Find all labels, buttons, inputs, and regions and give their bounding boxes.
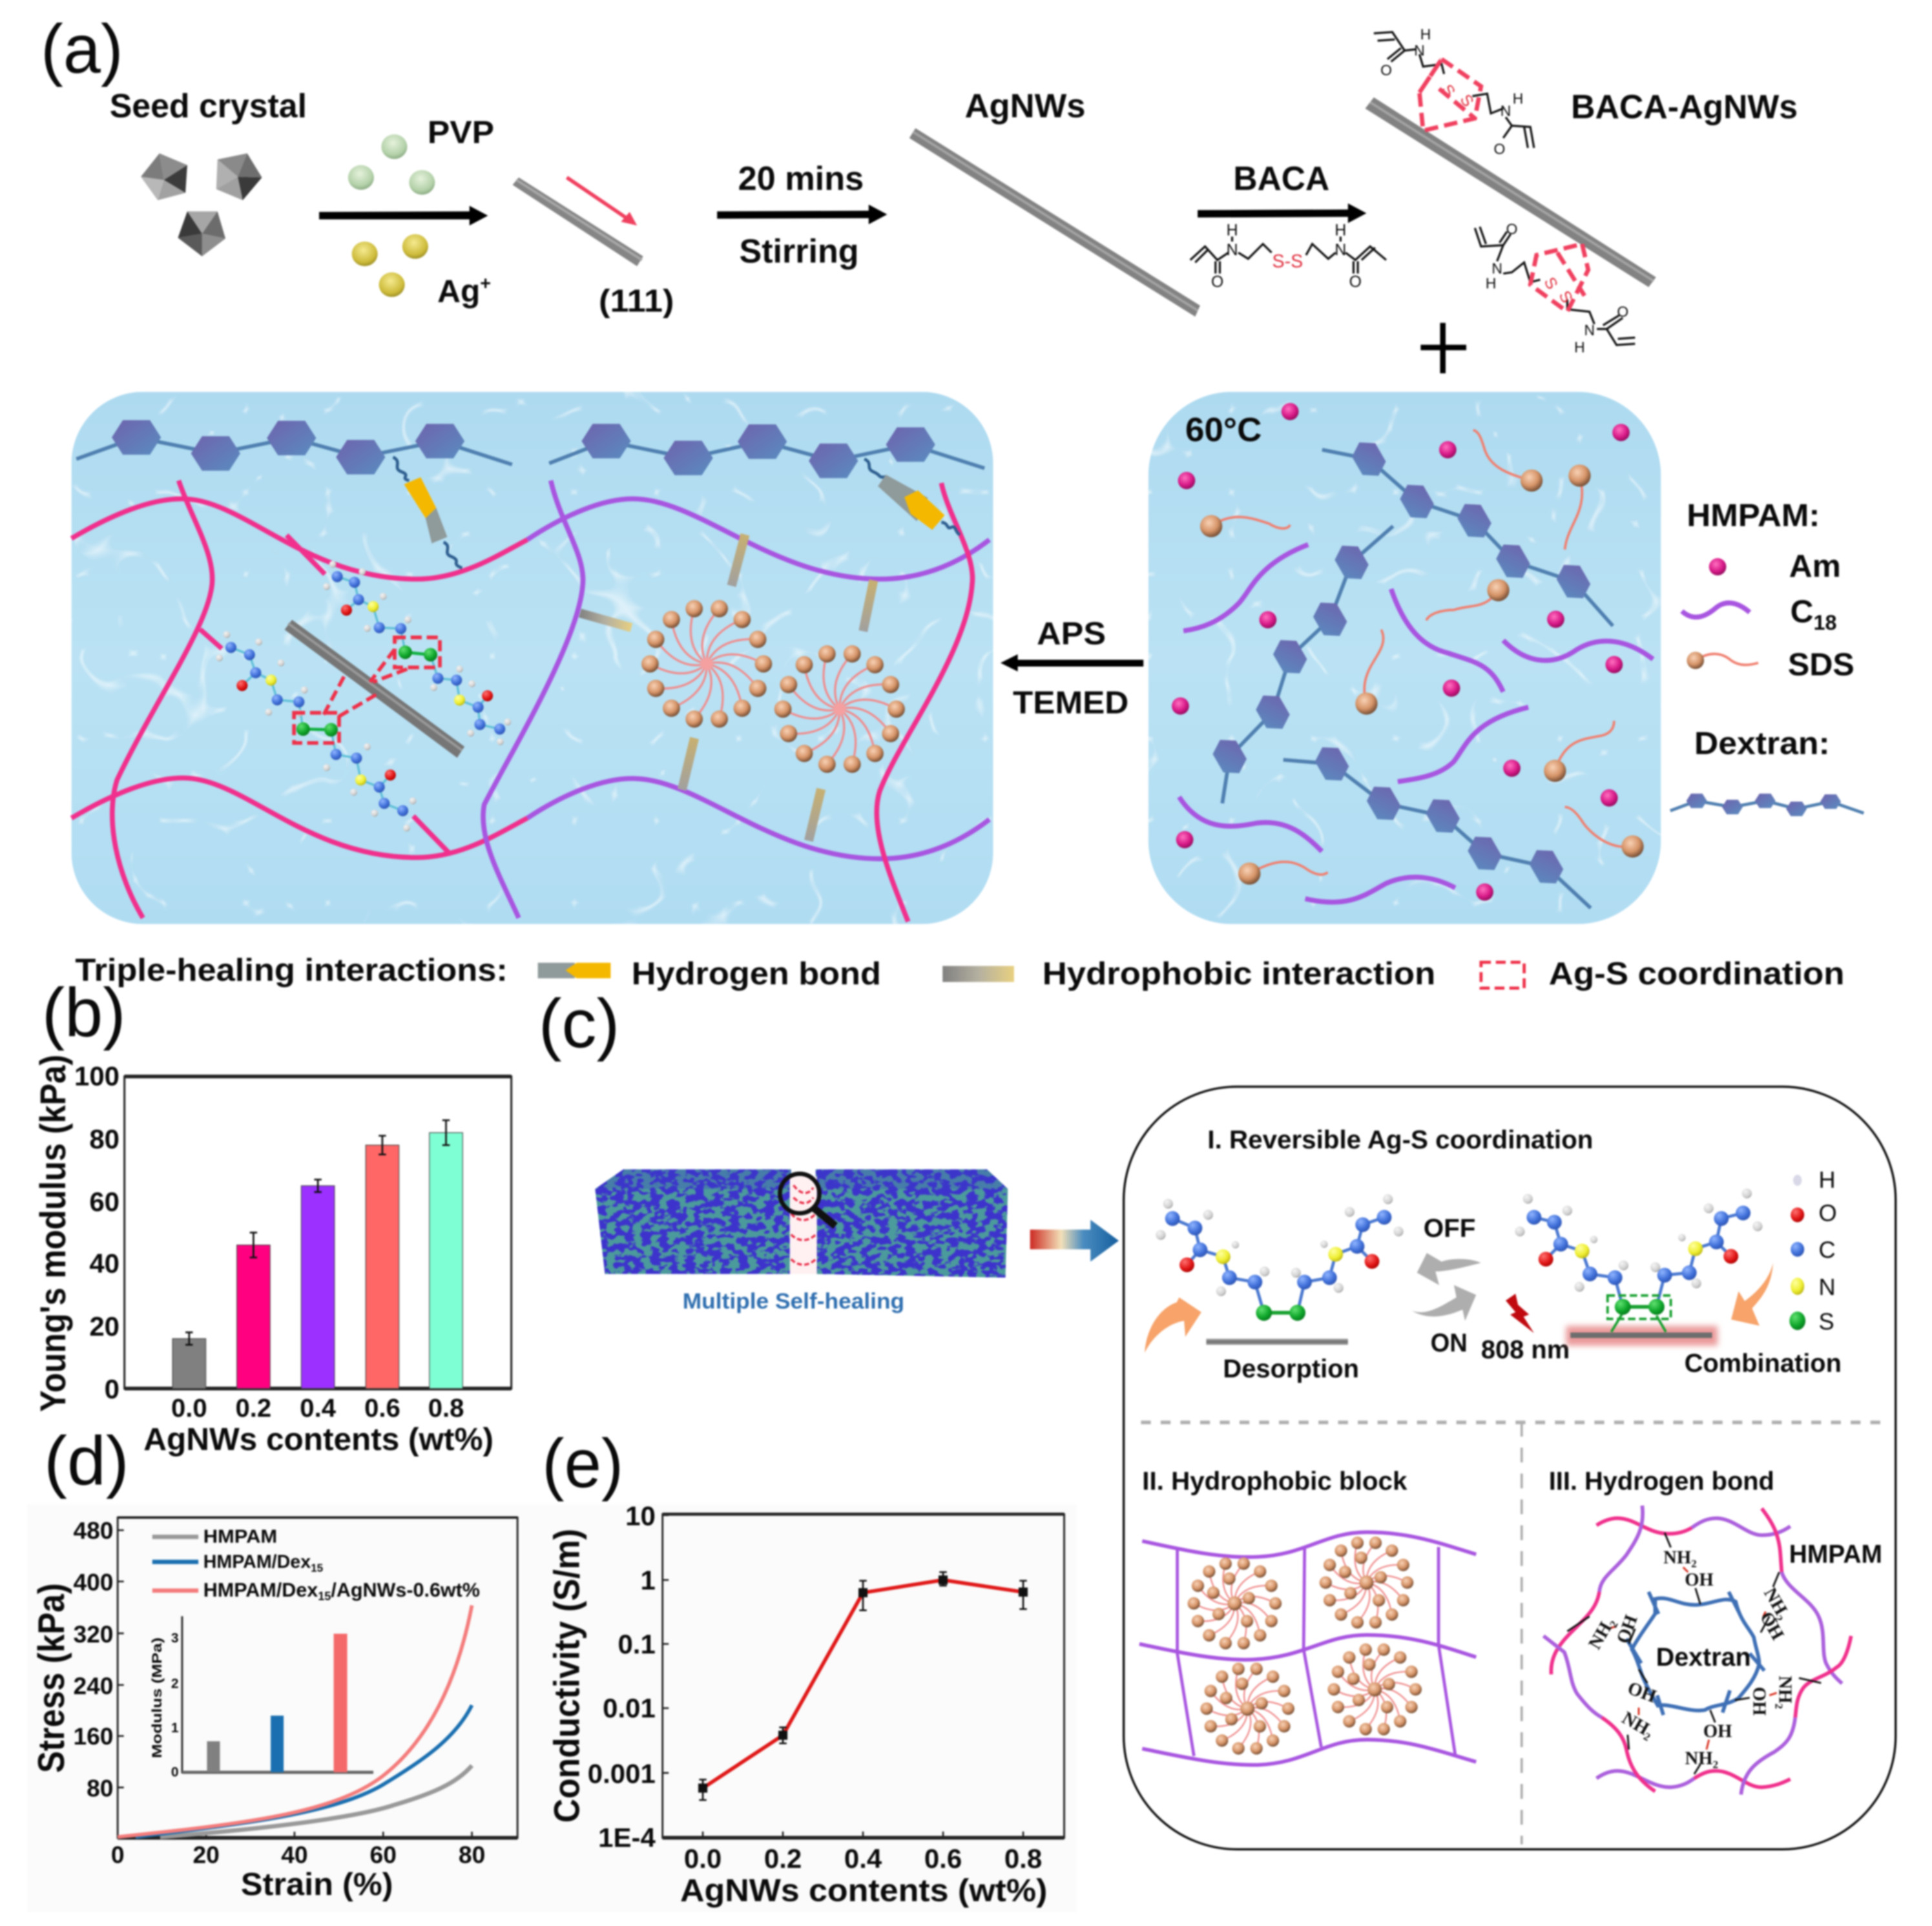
icon: dextran chain: [1670, 794, 1864, 816]
chemical structure: upper BACA on wire: N: [1414, 42, 1425, 59]
dextran chain 3: [1283, 741, 1591, 908]
bar chart: Young's modulus: [33, 1055, 512, 1457]
inset bar chart: modulus: [150, 1616, 373, 1780]
chemical labels: NH2 and OH: 2: [1691, 1557, 1697, 1569]
icon: SDS: [1687, 652, 1758, 669]
legend: atoms: O: [1819, 1199, 1837, 1226]
hydrogen bond block, right: [864, 459, 960, 535]
y tick labels: 1: [640, 1565, 656, 1595]
chemical labels: NH2 and OH: 2: [1607, 1619, 1621, 1630]
y tick labels: [73, 1517, 113, 1801]
legend: atoms: N: [1819, 1274, 1836, 1300]
x tick labels: 0.0: [684, 1843, 722, 1874]
heading: II: II. Hydrophobic block: [1142, 1467, 1407, 1495]
chemical structure: BACA: H: [1335, 222, 1346, 239]
legend: /AgNWs-0.6wt%: [331, 1579, 480, 1601]
label: 808 nm: 808 nm: [1481, 1336, 1570, 1364]
legend: 15: [318, 1590, 331, 1603]
Ag-S coordination dashed links: [324, 649, 407, 716]
dextran chain 1: [1322, 436, 1613, 626]
panel b label: (b): [42, 973, 126, 1051]
label: BACA: BACA: [1233, 160, 1329, 197]
chart frame: [663, 1514, 1065, 1838]
y-axis tick labels: 80: [89, 1124, 119, 1154]
y-axis tick labels: 0: [105, 1374, 119, 1404]
icon: long BACA nanowire: [1366, 98, 1656, 287]
y tick labels: [588, 1501, 656, 1852]
y tick labels: 480: [73, 1517, 113, 1544]
chemical labels: NH2 and OH: OH: [1749, 1687, 1769, 1715]
icon: PVP spheres: [348, 134, 435, 194]
chemical labels: NH2 and OH: 2: [1712, 1758, 1718, 1770]
x tick labels: 0.2: [764, 1843, 802, 1874]
y-axis tick labels: [74, 1061, 119, 1404]
line chart: conductivity: [547, 1501, 1065, 1908]
error bars: [185, 1120, 450, 1345]
label: (111): (111): [599, 283, 674, 319]
label: AgNWs: AgNWs: [965, 87, 1086, 124]
chemical structure: upper BACA on wire: H: [1420, 26, 1431, 43]
line chart: stress strain: [31, 1517, 517, 1902]
y tick labels: 1E-4: [598, 1822, 656, 1852]
panel a label: (a): [41, 10, 123, 88]
chemical labels: NH2 and OH: NH: [1663, 1548, 1691, 1568]
y tick labels: 10: [625, 1501, 656, 1531]
axis ticks: [663, 1515, 1023, 1838]
label: Dextran: Dextran:: [1694, 725, 1830, 761]
chemical structure: lower BACA on wire: N: [1491, 260, 1502, 277]
error bars and markers: [699, 1572, 1027, 1800]
legend: HMPAM/Dex: [203, 1552, 311, 1573]
SDS surfactant tails: [1211, 430, 1632, 875]
data line: [703, 1580, 1023, 1788]
label: Ag-S coordination: Ag-S coordination: [1549, 955, 1845, 991]
label: Am: Am: [1789, 548, 1841, 584]
icon: photothermal glow: [1566, 1326, 1718, 1345]
y tick labels: 80: [87, 1774, 113, 1801]
chemical structure: BACA: N: [1335, 242, 1346, 259]
label: desorption: Desorption: [1223, 1355, 1359, 1383]
network: hydrophobic grid: [1139, 1532, 1476, 1765]
arrow: gradient to mechanisms: [1030, 1220, 1119, 1261]
y tick labels: 320: [73, 1621, 113, 1648]
dextran chains: [76, 420, 984, 478]
heading: I: I. Reversible Ag-S coordination: [1207, 1126, 1593, 1154]
arrow with label: APS TEMED: [1001, 616, 1143, 721]
legend: triple-healing interactions: [75, 951, 1845, 991]
molecule: lower BACA ball and stick: [216, 631, 416, 831]
x-axis tick labels: 0.0: [171, 1394, 207, 1423]
legend: HMPAM: [203, 1526, 277, 1547]
chemical structure: BACA: H: [1227, 222, 1238, 239]
network: dextran ring: [1626, 1592, 1765, 1715]
icon: nanowire left: [1206, 1339, 1348, 1345]
chemical structure: lower BACA on wire: O: [1506, 221, 1517, 238]
arrow: grey off: [1417, 1253, 1481, 1285]
y tick labels: 160: [73, 1723, 113, 1750]
x tick labels: 80: [459, 1841, 485, 1868]
label: PVP: PVP: [428, 114, 494, 150]
bars: [172, 1133, 462, 1389]
network: HMPAM ring: [1544, 1506, 1851, 1795]
icon: long nanowire: [909, 128, 1200, 316]
molecule: adsorbed BACA: [1515, 1188, 1763, 1332]
icon: green dashed box: [1608, 1296, 1671, 1319]
water background: [72, 392, 993, 924]
panel: crosslinked hydrogel network: [72, 392, 993, 924]
label: combination: Combination: [1685, 1349, 1842, 1378]
label: C18: 18: [1813, 611, 1836, 634]
x-axis title: Strain (%): [241, 1866, 393, 1902]
chemical structure: BACA: O: [1349, 274, 1362, 291]
chemical structure: upper BACA on wire: S: [1438, 81, 1459, 100]
arrow: seed to nanorod: [319, 206, 488, 225]
panel d label: (d): [44, 1422, 129, 1500]
y-axis tick labels: 20: [89, 1311, 119, 1341]
chemical labels: NH2 and OH: 2: [1773, 1703, 1785, 1709]
label: SDS: SDS: [1788, 646, 1854, 682]
label: Ag+: Ag: [437, 273, 480, 309]
curve: HMPAM/Dex15: [136, 1705, 472, 1837]
panel outline: [1124, 1087, 1896, 1849]
chemical structure: upper BACA on wire: H: [1513, 90, 1523, 107]
y tick labels: 0.1: [618, 1629, 656, 1659]
label: 20 mins: 20 mins: [738, 160, 864, 197]
chemical labels: NH2 and OH: 2: [1641, 1730, 1652, 1744]
icon: nanowire in network: [285, 620, 464, 758]
water background: [1148, 392, 1661, 924]
chemical labels: NH2 and OH: [1585, 1548, 1794, 1770]
illustration: self-healing hydrogel block: [595, 1169, 1008, 1314]
chemical structure: lower BACA on wire: H: [1486, 274, 1496, 291]
arrow: grey on: [1412, 1285, 1476, 1321]
label: 60C: 60°C: [1185, 411, 1262, 448]
chemical structure: upper BACA on wire: S: [1457, 91, 1477, 110]
arrow: BACA reaction: [1198, 203, 1366, 223]
inset bar chart: modulus: 0: [171, 1765, 179, 1780]
label: HMPAM: HMPAM:: [1687, 497, 1820, 533]
x tick labels: 0.6: [924, 1843, 962, 1874]
x-axis title: AgNWs contents (wt%): [143, 1421, 493, 1457]
micelles: [641, 600, 905, 773]
legend: 15: [311, 1561, 324, 1574]
chemical labels: NH2 and OH: OH: [1756, 1609, 1787, 1644]
y-axis tick labels: 40: [89, 1248, 119, 1279]
x tick labels: 0: [111, 1841, 125, 1868]
inset bar chart: modulus: 3: [171, 1631, 179, 1646]
chemical structure: lower BACA on wire: O: [1617, 303, 1628, 320]
icon: lightning: [1506, 1294, 1534, 1333]
inset bar chart: modulus: 1: [171, 1721, 179, 1735]
y-axis tick labels: 100: [74, 1061, 119, 1092]
y-axis tick labels: 60: [89, 1186, 119, 1217]
chemical structure: upper BACA on wire: O: [1494, 141, 1505, 158]
label: Dextran: Dextran: [1656, 1643, 1751, 1672]
label: triple-healing: Triple-healing interactions:: [75, 951, 508, 988]
chemical structure: BACA: N: [1227, 242, 1238, 259]
chemical structure: upper BACA on wire: [1374, 26, 1534, 158]
icon: short nanorod: [513, 178, 643, 266]
divider lines: [1141, 1422, 1883, 1845]
curve: HMPAM: [160, 1766, 472, 1837]
legend: atoms: S: [1819, 1308, 1834, 1334]
block faces: [595, 1169, 1008, 1278]
SDS surfactant heads: [1200, 464, 1644, 885]
icon: hydrogen bond: [538, 963, 610, 979]
x-axis title: AgNWs contents (wt%): [680, 1872, 1047, 1908]
x tick labels: [684, 1843, 1042, 1874]
icon: magnifier: [780, 1174, 835, 1226]
chemical labels: NH2 and OH: 2: [1772, 1613, 1785, 1624]
icon: seed crystals: [141, 153, 262, 256]
axis ticks: [118, 1530, 472, 1838]
heading: III: III. Hydrogen bond: [1549, 1467, 1774, 1495]
x-axis tick labels: 0.8: [428, 1394, 464, 1423]
icon: Am: [1709, 558, 1726, 575]
x-axis tick labels: 0.4: [300, 1394, 337, 1423]
label: OFF: OFF: [1424, 1214, 1475, 1243]
molecule: desorbed BACA: [1156, 1194, 1404, 1321]
chemical labels: NH2 and OH: OH: [1613, 1613, 1642, 1646]
chemical structure: BACA: [1190, 222, 1386, 291]
label: Stirring: Stirring: [740, 232, 859, 269]
y-axis title: Stress (kPa): [31, 1583, 72, 1773]
arrow: growth direction: [566, 178, 637, 225]
x-axis tick labels: 0.6: [364, 1394, 400, 1423]
arrow with label: APS TEMED: TEMED: [1013, 685, 1128, 721]
chemical labels: NH2 and OH: OH: [1685, 1570, 1714, 1590]
molecule: upper BACA ball and stick: [323, 561, 511, 745]
chemical labels: NH2 and OH: OH: [1703, 1722, 1732, 1742]
chemical structure: lower BACA on wire: H: [1574, 339, 1585, 356]
panel: healing mechanisms: [1124, 1087, 1896, 1849]
arrow: orange left: [1145, 1298, 1201, 1353]
chemical labels: NH2 and OH: NH: [1760, 1584, 1791, 1619]
arrow: orange right: [1731, 1263, 1773, 1326]
chemical labels: NH2 and OH: NH: [1618, 1708, 1652, 1739]
chart frame: [125, 1077, 512, 1389]
x tick labels: [111, 1841, 485, 1868]
x-axis tick labels: 0.2: [236, 1394, 271, 1423]
C18 chains: [1179, 544, 1653, 902]
y-axis title: Conductivity (S/m): [547, 1529, 587, 1823]
x tick labels: 0.4: [844, 1843, 882, 1874]
icon: Ag+ spheres: [352, 234, 428, 297]
chemical structure: upper BACA on wire: N: [1501, 102, 1511, 119]
inset bar chart: modulus: Modulus (MPa): [150, 1637, 165, 1758]
label: HMPAM: HMPAM: [1789, 1540, 1882, 1569]
x-axis tick labels: [171, 1394, 464, 1423]
legend: atoms: C: [1819, 1237, 1836, 1263]
arrow with label: APS TEMED: APS: [1037, 616, 1106, 652]
x tick labels: 20: [192, 1841, 220, 1868]
label: BACA-AgNWs: BACA-AgNWs: [1571, 88, 1798, 125]
inset bar chart: modulus: 2: [171, 1676, 179, 1691]
chemical labels: NH2 and OH: NH: [1774, 1676, 1794, 1703]
panel: precursor solution at 60C: [1148, 392, 1661, 924]
hydrogen bond tethers: [1567, 1533, 1821, 1774]
chemical structure: BACA: O: [1211, 274, 1223, 291]
x tick labels: 40: [281, 1841, 308, 1868]
Ag-S coordination boxes: [294, 637, 440, 743]
label: hydrogen bond: Hydrogen bond: [632, 955, 881, 991]
HMPAM network strands: [72, 481, 990, 922]
legend: atoms: [1789, 1166, 1837, 1334]
chemical structure: lower BACA on wire: [1475, 221, 1635, 356]
chemical structure: upper BACA on wire: O: [1380, 61, 1392, 78]
y tick labels: 0.01: [603, 1693, 656, 1723]
curve: HMPAM/Dex15/AgNWs: [118, 1606, 472, 1837]
y tick labels: 400: [73, 1569, 113, 1596]
chemical labels: NH2 and OH: OH: [1625, 1678, 1659, 1707]
hydrophobic interaction rods: [579, 533, 878, 842]
y tick labels: 0.001: [588, 1758, 656, 1788]
panel c label: (c): [539, 984, 619, 1062]
label: hydrophobic interaction: Hydrophobic interaction: [1043, 955, 1435, 991]
healing seam: [790, 1177, 817, 1274]
panel: AgNWs synthesis route: [110, 26, 1798, 373]
chemical labels: NH2 and OH: NH: [1685, 1749, 1712, 1769]
legend: HMPAM/Dex: [203, 1579, 318, 1601]
icon: hydrophobic interaction: [942, 966, 1014, 982]
chart frame: [118, 1518, 517, 1838]
chemical structure: lower BACA on wire: S: [1541, 274, 1561, 293]
dextran chain 2: [1209, 526, 1393, 803]
label: ON: ON: [1431, 1329, 1468, 1358]
legend: HMPAM and dextran: [1670, 497, 1864, 816]
chemical structure: lower BACA on wire: N: [1584, 322, 1595, 338]
label: multiple self-healing: Multiple Self-healing: [683, 1289, 904, 1314]
legend: atoms: H: [1819, 1166, 1836, 1193]
icon: nanowire right: [1570, 1332, 1712, 1338]
x tick labels: 0.8: [1004, 1843, 1042, 1874]
chemical structure: BACA: S-S: [1272, 251, 1303, 272]
micelles in grid: [1188, 1537, 1422, 1755]
label: seed crystal: Seed crystal: [110, 87, 307, 124]
legend: [152, 1526, 480, 1603]
chemical labels: NH2 and OH: NH: [1585, 1619, 1616, 1653]
y-axis title: Young's modulus (kPa): [33, 1055, 73, 1412]
icon: plus sign: [1420, 323, 1466, 373]
hydrogen bond block, left: [393, 457, 462, 568]
x tick labels: 60: [370, 1841, 397, 1868]
Am monomers: [1172, 403, 1630, 900]
chemical structure: lower BACA on wire: S: [1555, 288, 1575, 306]
label: Ag+: +: [480, 273, 491, 294]
arrow: stirring: [717, 205, 887, 224]
label: C18: C: [1791, 593, 1813, 629]
panel e label: (e): [542, 1424, 623, 1502]
icon: Ag-S coordination: [1481, 962, 1524, 988]
y tick labels: 240: [73, 1672, 113, 1699]
off-white chart backdrop: [27, 1504, 1077, 1912]
icon: C18: [1682, 603, 1750, 617]
